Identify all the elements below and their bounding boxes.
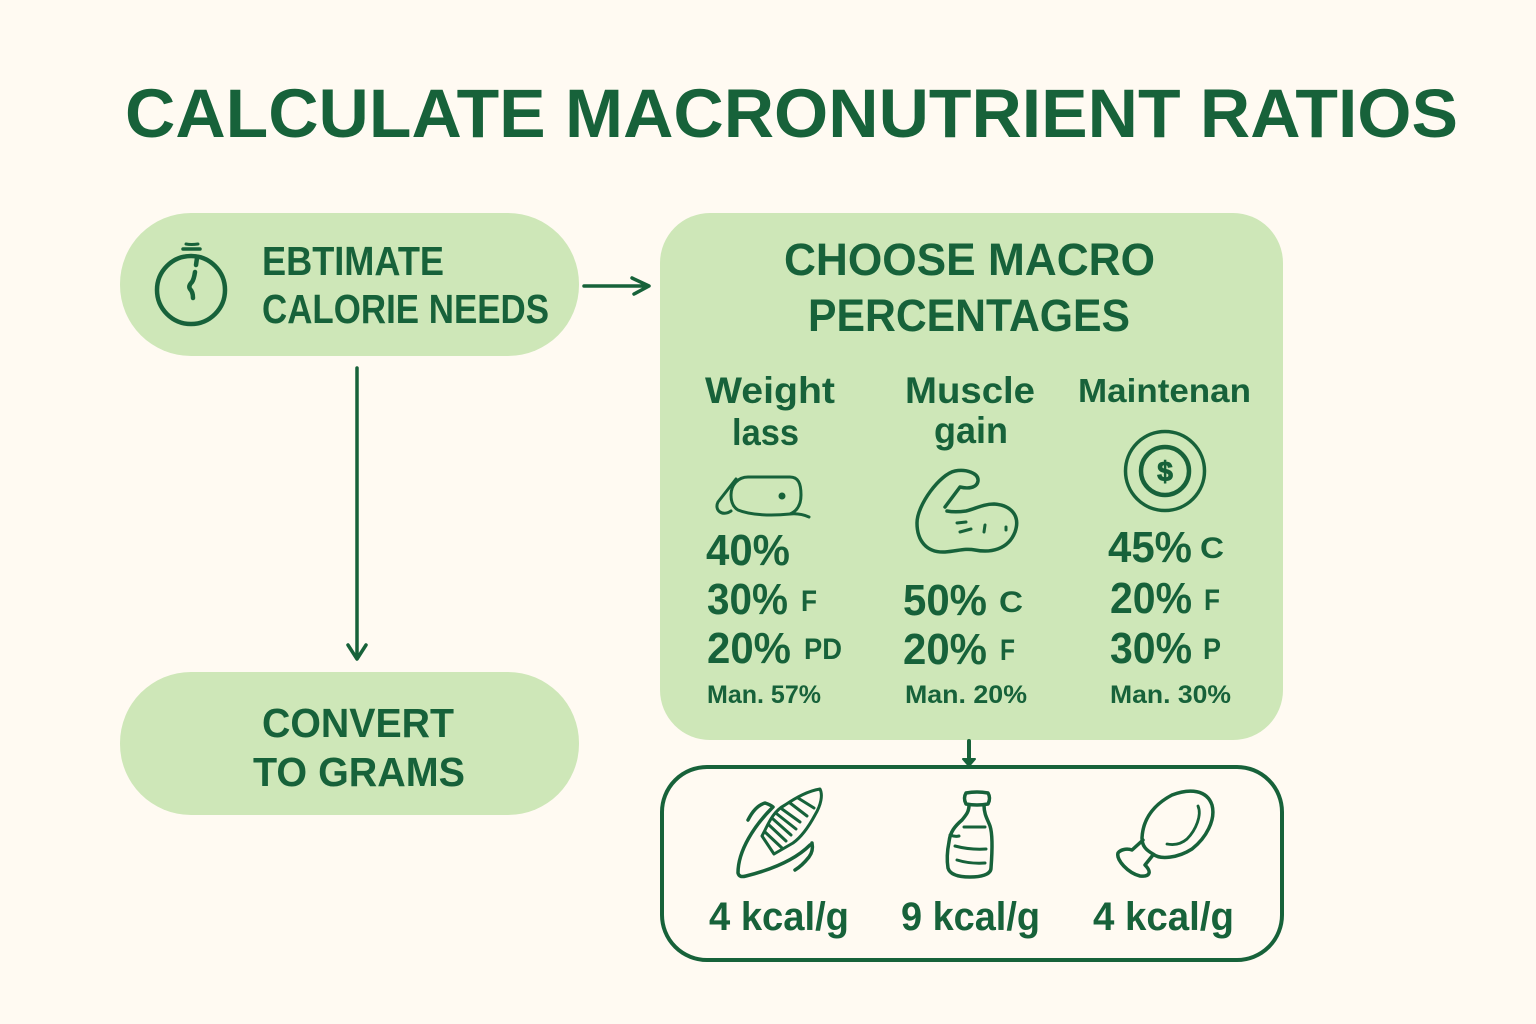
stats: maintenance: C [1200, 532, 1224, 565]
stats: muscle gain: F [1000, 634, 1015, 667]
icon: flexed arm [917, 470, 1017, 552]
text: carbohydrate energy: 4 kcal/g [709, 895, 849, 939]
stats: maintenance: 20% [1110, 574, 1192, 623]
heading: estimate calorie needs: EBTIMATE [262, 238, 444, 284]
icon: body [717, 477, 809, 517]
stats: maintenance: 45% [1108, 523, 1192, 572]
heading: estimate calorie needs: CALORIE NEEDS [262, 286, 549, 332]
icon: drumstick [1118, 791, 1213, 876]
stats: maintenance: 30% [1110, 624, 1192, 673]
heading: choose macro percentages [784, 234, 1155, 341]
arrow: estimate to percentages [584, 278, 649, 294]
icon: bottle [947, 792, 992, 877]
stats: muscle gain [903, 576, 1027, 709]
stats: maintenance: F [1204, 584, 1220, 617]
stats: muscle gain: Man. 20% [905, 681, 1027, 709]
stats: muscle gain: C [999, 586, 1023, 619]
arrow: percentages to energy values [963, 741, 975, 766]
text: protein energy: 4 kcal/g [1093, 895, 1234, 939]
stats: maintenance: Man. 30% [1110, 681, 1231, 709]
stats: maintenance: P [1203, 633, 1221, 666]
stats: weight loss [706, 526, 842, 709]
text: fat energy: 9 kcal/g [901, 895, 1040, 939]
stats: weight loss: 30% [707, 575, 788, 624]
panel: choose macro percentages [660, 213, 1283, 740]
column: maintenance [1078, 372, 1251, 709]
stats: weight loss: F [801, 585, 817, 618]
heading: convert to grams [253, 700, 465, 795]
title: CALCULATE MACRONUTRIENT RATIOS [125, 75, 1458, 152]
icon: corn [738, 789, 821, 877]
icon: stopwatch [157, 244, 225, 324]
stats: muscle gain: 20% [903, 625, 987, 674]
stats: weight loss: Man. 57% [707, 681, 821, 709]
icon: coin target [1126, 432, 1204, 510]
label: weight loss: Weight [705, 370, 835, 411]
heading: convert to grams: CONVERT [262, 700, 454, 746]
heading: estimate calorie needs [262, 238, 549, 332]
panel: estimate calorie needs [120, 213, 579, 356]
stats: weight loss: 20% [707, 624, 791, 673]
column: muscle gain [903, 370, 1035, 709]
column: weight loss [705, 370, 842, 709]
panel: energy per gram [662, 767, 1282, 960]
heading: choose macro percentages: CHOOSE MACRO [784, 234, 1155, 285]
label: maintenance: Maintenan [1078, 372, 1251, 409]
icon: coin target: $ [1157, 456, 1173, 487]
label: muscle gain [905, 370, 1035, 451]
stats: weight loss: 40% [706, 526, 790, 575]
label: muscle gain: Muscle [905, 370, 1035, 411]
stats: weight loss: PD [804, 633, 842, 666]
stats: maintenance [1108, 523, 1231, 709]
label: weight loss [705, 370, 835, 453]
panel: convert to grams [120, 672, 579, 815]
stats: muscle gain: 50% [903, 576, 987, 625]
label: muscle gain: gain [934, 410, 1008, 451]
heading: convert to grams: TO GRAMS [253, 749, 465, 795]
arrow: estimate to convert [348, 368, 366, 659]
label: weight loss: lass [732, 412, 799, 453]
heading: choose macro percentages: PERCENTAGES [808, 290, 1130, 341]
